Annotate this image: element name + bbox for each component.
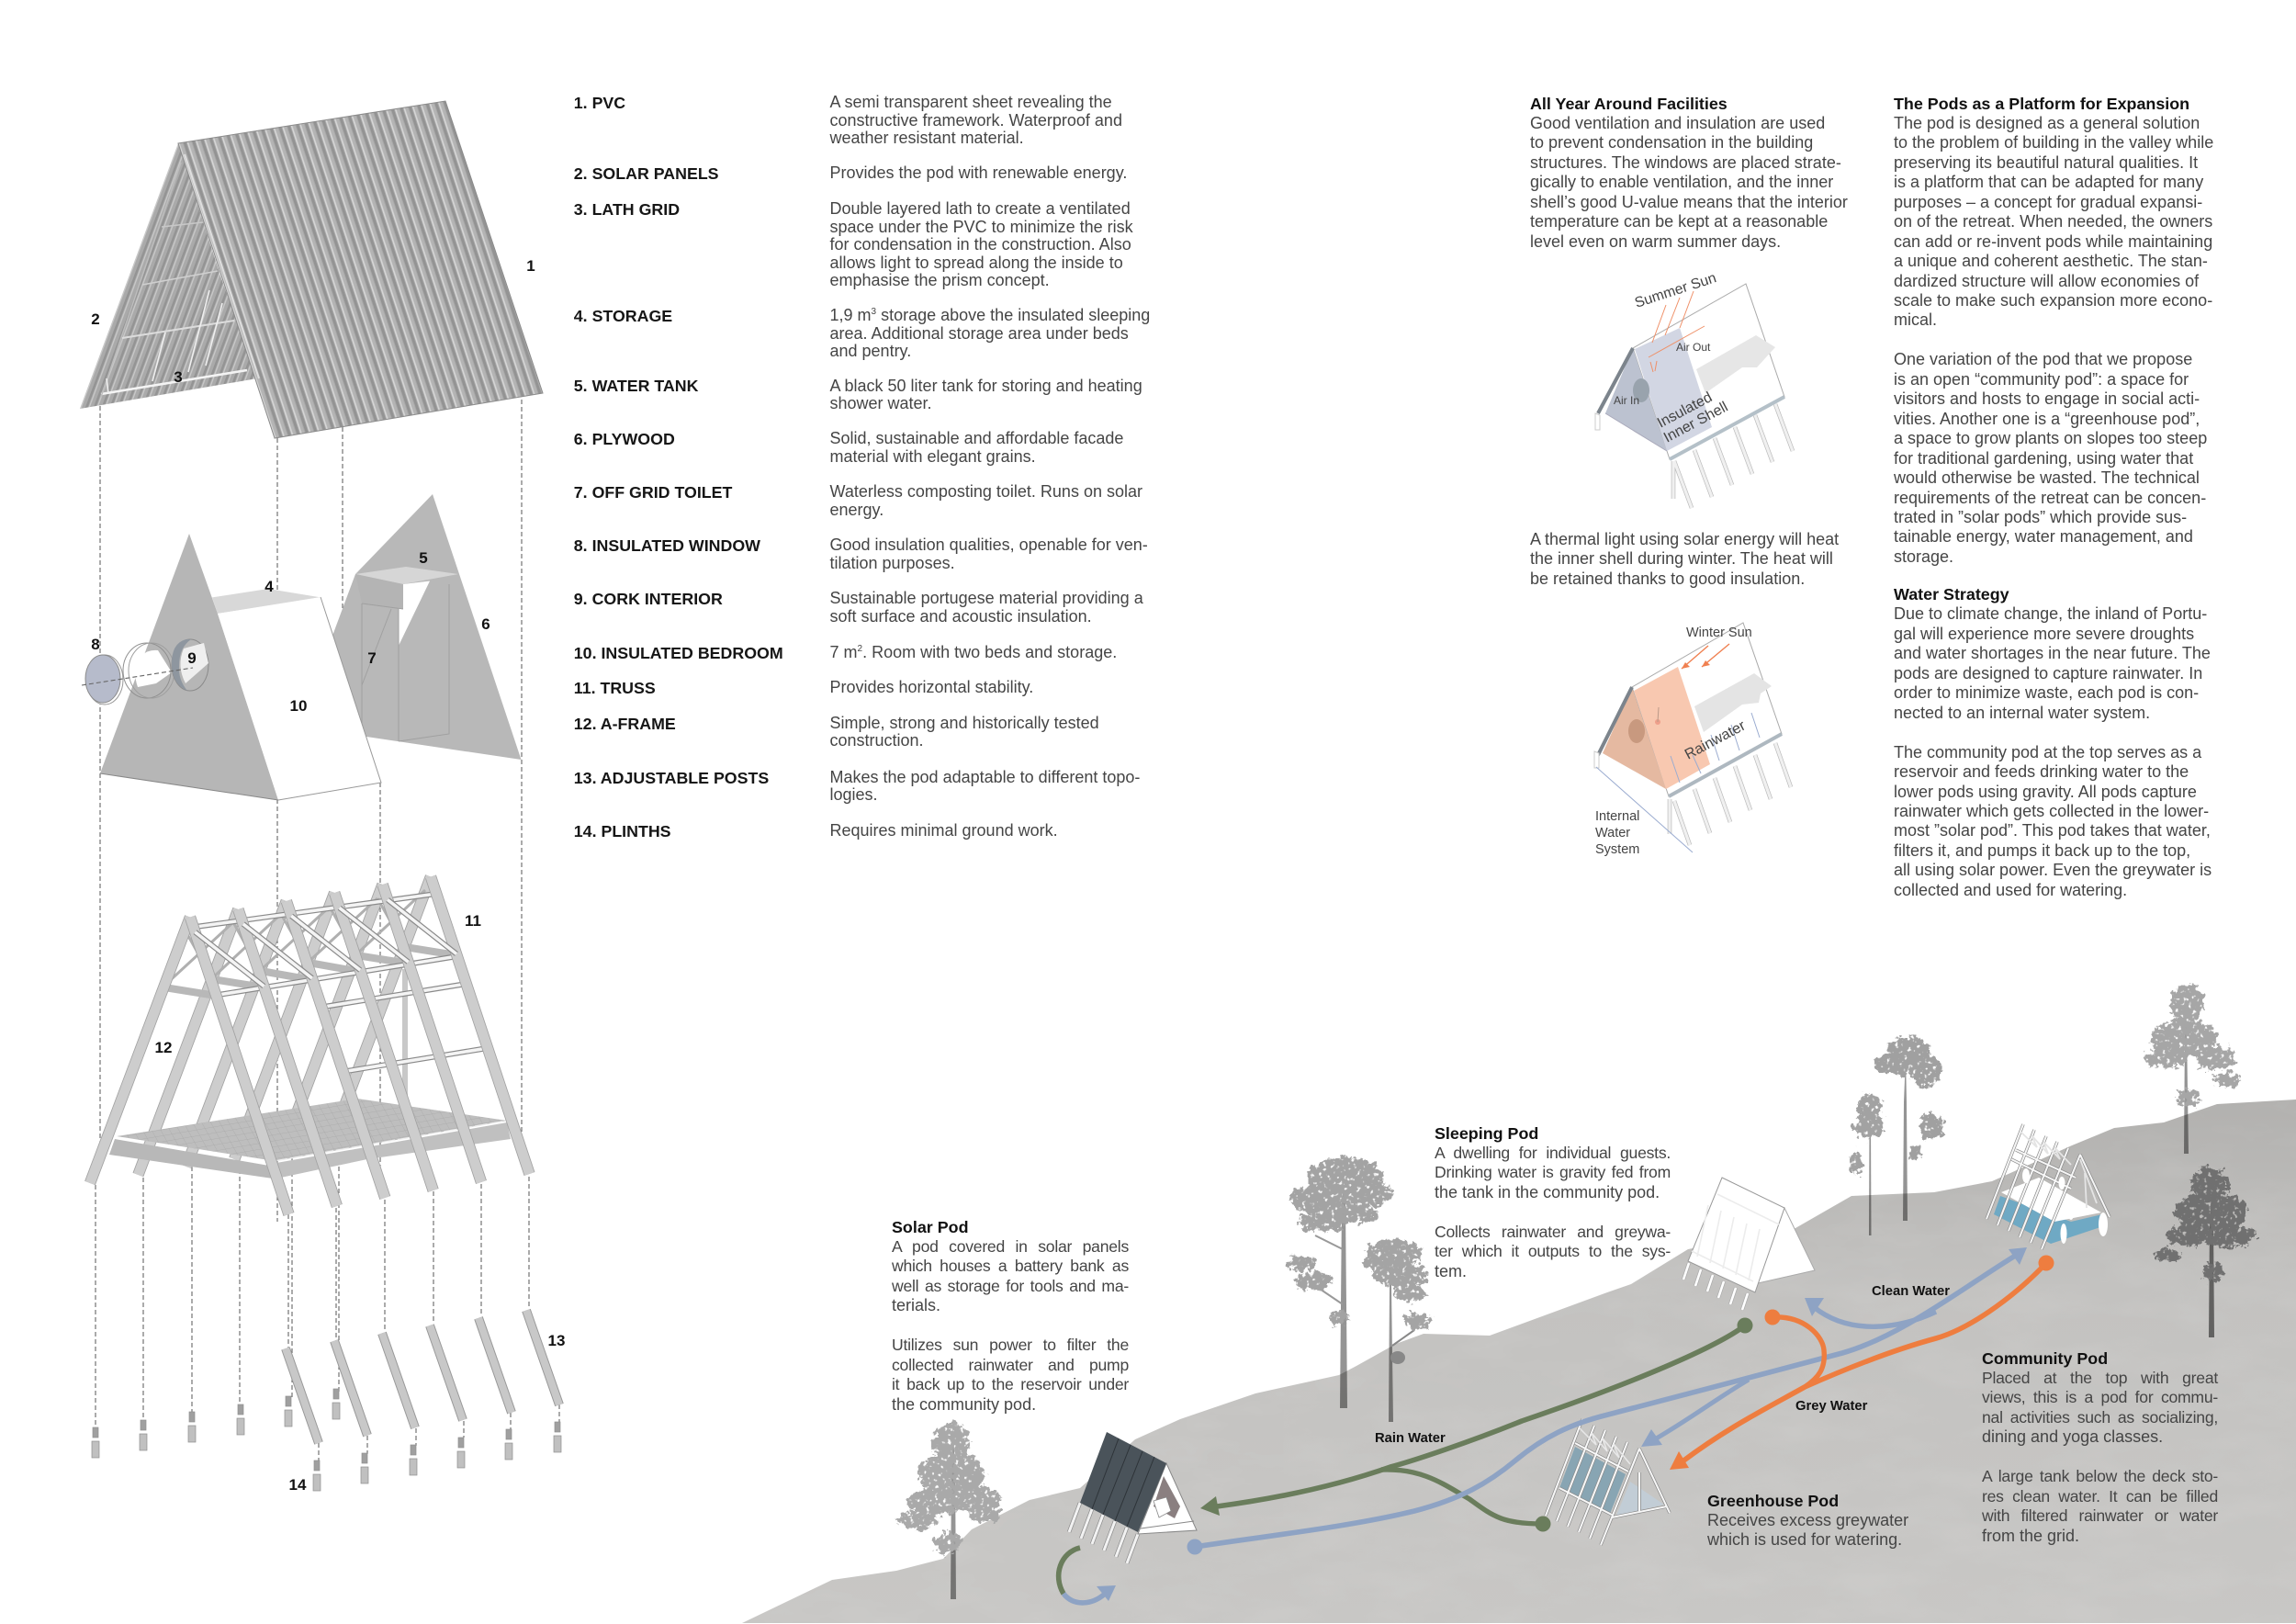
- item 5: [574, 377, 1142, 412]
- right legs: [431, 876, 529, 1174]
- pod: sleeping: [1683, 1178, 1815, 1310]
- diagram: winter heating and rainwater: Internal: [1595, 809, 1639, 824]
- component list: energy.: [830, 501, 884, 519]
- text: platform for expansion: is a platform that can be adapted for many: [1894, 173, 2203, 191]
- component list: area. Additional storage area under beds: [830, 323, 1129, 342]
- component list: for condensation in the construction. Also: [830, 235, 1131, 254]
- text: platform for expansion: for traditional gardening, using water that: [1894, 449, 2193, 468]
- text: water strategy: gal will experience more severe droughts: [1894, 625, 2194, 643]
- people: [2022, 1168, 2108, 1244]
- text: thermal light: the inner shell during winter. The heat will: [1530, 549, 1833, 568]
- text: thermal light: [1530, 530, 1839, 588]
- item 6: [574, 429, 1123, 466]
- diagram: summer ventilation: Air In: [1614, 394, 1639, 407]
- axonometric: exploded pod: [80, 101, 565, 1494]
- tree: centre left tall pine: [1288, 1157, 1392, 1408]
- component list: A black 50 liter tank for storing and heating: [830, 377, 1142, 395]
- component numbers: [91, 257, 565, 1494]
- component list: allows light to spread along the inside to: [830, 254, 1123, 272]
- text: community pod: with filtered rainwater or water: [1982, 1506, 2218, 1525]
- component list: constructive framework. Waterproof and: [830, 110, 1122, 129]
- tree: upper slope tall pine: [1874, 1037, 1944, 1221]
- text: platform for expansion: a unique and coherent aesthetic. The stan-: [1894, 252, 2208, 270]
- component list: 14. PLINTHS: [574, 822, 671, 840]
- text: community pod: A large tank below the deck sto-: [1982, 1467, 2218, 1485]
- text: platform for expansion: visitors and hosts to engage in social acti-: [1894, 389, 2200, 408]
- text: solar pod: well as storage for tools and ma-: [892, 1277, 1129, 1295]
- text: water strategy: reservoir and feeds drinking water to the: [1894, 762, 2189, 781]
- roof laths: [196, 894, 457, 995]
- component list: A semi transparent sheet revealing the: [830, 93, 1112, 111]
- sun and air arrows: [1649, 291, 1705, 372]
- text: thermal light: be retained thanks to good insulation.: [1530, 570, 1805, 588]
- text: all year around facilities: Good ventilation and insulation are used: [1530, 114, 1825, 132]
- text: community pod: nal activities such as socializing,: [1982, 1408, 2218, 1427]
- text: all year around facilities: structures. The windows are placed strate-: [1530, 153, 1841, 172]
- lath grid bars: [101, 154, 259, 397]
- component list: Sustainable portugese material providing a: [830, 589, 1143, 607]
- text: platform for expansion: The pod is designed as a general solution: [1894, 114, 2200, 132]
- diagram: summer ventilation: Insulated: [1655, 389, 1715, 432]
- component list: 10. INSULATED BEDROOM: [574, 644, 783, 662]
- text: water strategy: order to minimize waste, each pod is con-: [1894, 683, 2199, 702]
- flow labels: Rain Water: [1375, 1431, 1446, 1446]
- pod: solar: [1069, 1432, 1197, 1563]
- component list: Provides the pod with renewable energy.: [830, 164, 1127, 182]
- component list: shower water.: [830, 394, 932, 412]
- component numbers: 11: [465, 912, 481, 930]
- text: platform for expansion: vities. Another one is a “greenhouse pod”,: [1894, 410, 2200, 428]
- text: greenhouse pod: Greenhouse Pod: [1707, 1492, 1839, 1510]
- diagram: winter heating and rainwater: System: [1595, 842, 1639, 857]
- item 11: [574, 678, 1033, 697]
- water flow: grey water (orange): [1670, 1255, 2054, 1470]
- item 1: [574, 93, 1122, 147]
- text: greenhouse pod: which is used for watering.: [1707, 1530, 1902, 1549]
- component list: Makes the pod adaptable to different topo-: [830, 768, 1140, 786]
- component numbers: 13: [548, 1332, 565, 1349]
- item 8: [574, 536, 1148, 572]
- flow labels: Grey Water: [1795, 1399, 1868, 1414]
- component list: Requires minimal ground work.: [830, 821, 1058, 840]
- text: platform for expansion: requirements of the retreat can be concen-: [1894, 489, 2206, 507]
- dashed guide lines: [96, 400, 559, 1460]
- component list: 1,9 m3 storage above the insulated sleeping: [830, 306, 1150, 324]
- component list: Simple, strong and historically tested: [830, 714, 1099, 732]
- posts: adjustable: [286, 1310, 559, 1443]
- component numbers: 12: [155, 1039, 172, 1056]
- sun and rain arrows: [1682, 644, 1729, 669]
- component list: Double layered lath to create a ventilated: [830, 199, 1131, 218]
- component list: Good insulation qualities, openable for ven-: [830, 536, 1148, 554]
- text: platform for expansion: is an open “community pod”: a space for: [1894, 370, 2189, 389]
- text: community pod: views, this is a pod for commu-: [1982, 1388, 2218, 1406]
- component list: 2. SOLAR PANELS: [574, 164, 719, 183]
- diagram: summer ventilation: [1595, 270, 1793, 508]
- text: platform for expansion: on of the retreat. When needed, the owners: [1894, 212, 2212, 231]
- component numbers: 2: [91, 310, 100, 328]
- item 9: [574, 589, 1143, 626]
- component list: 12. A-FRAME: [574, 715, 676, 733]
- text: water strategy: [1894, 585, 2212, 899]
- component list: 9. CORK INTERIOR: [574, 590, 723, 608]
- text: all year around facilities: level even on warm summer days.: [1530, 232, 1781, 251]
- tree: dark pine: [2156, 1167, 2257, 1337]
- text: sleeping pod: Collects rainwater and greywa-: [1435, 1223, 1671, 1241]
- water flow: rain water (green): [1200, 1317, 1752, 1532]
- component list: 7. OFF GRID TOILET: [574, 483, 732, 502]
- text: water strategy: Water Strategy: [1894, 585, 2009, 603]
- component list: emphasise the prism concept.: [830, 271, 1050, 289]
- text: solar pod: Utilizes sun power to filter the: [892, 1336, 1129, 1354]
- component numbers: 5: [419, 549, 428, 567]
- flow labels: [1375, 1284, 1950, 1446]
- component list: tilation purposes.: [830, 554, 955, 572]
- diagram: summer ventilation: Summer Sun: [1633, 270, 1718, 311]
- component list: weather resistant material.: [830, 129, 1024, 147]
- tree: upper slope small pine: [1851, 1094, 1885, 1235]
- component list: 7 m2. Room with two beds and storage.: [830, 643, 1117, 661]
- item 7: [574, 482, 1142, 519]
- text: all year around facilities: [1530, 94, 1848, 251]
- item 12: [574, 714, 1099, 750]
- component numbers: 7: [367, 649, 377, 667]
- text: solar pod: it back up to the reservoir under: [892, 1375, 1129, 1393]
- component list: Waterless composting toilet. Runs on solar: [830, 482, 1142, 501]
- pod: greenhouse: [1546, 1419, 1670, 1545]
- component list: Solid, sustainable and affordable facade: [830, 429, 1123, 447]
- text: water strategy: Due to climate change, the inland of Portu-: [1894, 604, 2207, 623]
- text: platform for expansion: scale to make such expansion more econo-: [1894, 291, 2212, 310]
- text: sleeping pod: A dwelling for individual guests.: [1435, 1144, 1671, 1162]
- component list: construction.: [830, 731, 924, 750]
- text: sleeping pod: [1435, 1124, 1671, 1280]
- component list: Provides horizontal stability.: [830, 678, 1033, 696]
- item 13: [574, 768, 1140, 804]
- text: community pod: res clean water. It can be filled: [1982, 1487, 2218, 1506]
- component list: 5. WATER TANK: [574, 377, 698, 395]
- item 3: [574, 199, 1133, 289]
- component list: material with elegant grains.: [830, 447, 1036, 466]
- text: water strategy: rainwater which gets collected in the lower-: [1894, 802, 2209, 820]
- text: water strategy: pods are designed to capture rainwater. In: [1894, 664, 2202, 682]
- text: solar pod: Solar Pod: [892, 1218, 969, 1236]
- text: platform for expansion: The Pods as a Platform for Expansion: [1894, 94, 2189, 112]
- text: all year around facilities: to prevent condensation in the building: [1530, 133, 1813, 152]
- prism: back facade with toilet and tank: [332, 494, 522, 760]
- text: community pod: [1982, 1348, 2219, 1545]
- diagram: winter heating and rainwater: Water: [1595, 826, 1630, 840]
- component list: soft surface and acoustic insulation.: [830, 607, 1092, 626]
- item 10: [574, 643, 1117, 662]
- text: platform for expansion: trated in ”solar pods” which provide sus-: [1894, 508, 2187, 526]
- component list: 13. ADJUSTABLE POSTS: [574, 769, 769, 787]
- diagram: winter heating and rainwater: Winter Sun: [1686, 626, 1752, 640]
- item 2: [574, 164, 1127, 183]
- text: platform for expansion: to the problem of building in the valley while: [1894, 133, 2213, 152]
- text: sleeping pod: ter which it outputs to the sys-: [1435, 1242, 1671, 1260]
- component numbers: 10: [290, 697, 307, 715]
- component list: 6. PLYWOOD: [574, 430, 675, 448]
- component list: [574, 93, 1150, 840]
- text: thermal light: A thermal light using solar energy will heat: [1530, 530, 1839, 548]
- component list: and pentry.: [830, 342, 911, 360]
- text: greenhouse pod: Receives excess greywater: [1707, 1511, 1908, 1529]
- icon: solar pod circular arrow: [1059, 1548, 1116, 1603]
- text: water strategy: collected and used for watering.: [1894, 881, 2127, 899]
- text: water strategy: and water shortages in the near future. The: [1894, 644, 2211, 662]
- component numbers: 4: [264, 578, 274, 595]
- item 4: [574, 306, 1150, 360]
- component numbers: 9: [187, 649, 197, 667]
- text: water strategy: nected to an internal water system. The community pod at the top serves as a: [1894, 704, 2201, 761]
- component numbers: 14: [289, 1476, 307, 1494]
- water flow: clean water (blue): [1187, 1247, 2027, 1554]
- item 14: [574, 821, 1058, 840]
- text: sleeping pod: Drinking water is gravity fed from: [1435, 1163, 1671, 1181]
- diagram: summer ventilation: Inner Shell: [1661, 400, 1730, 446]
- component list: 11. TRUSS: [574, 679, 656, 697]
- terrain: hillside: [735, 1093, 2296, 1624]
- text: community pod: Placed at the top with great: [1982, 1369, 2218, 1387]
- component numbers: 6: [481, 615, 490, 633]
- component list: logies.: [830, 785, 878, 804]
- frame: A-frame truss and floor: [90, 876, 529, 1214]
- text: solar pod: A pod covered in solar panels: [892, 1237, 1129, 1256]
- text: water strategy: most ”solar pod”. This pod takes that water,: [1894, 821, 2211, 840]
- window: insulated frame rings: [82, 639, 208, 705]
- text: platform for expansion: dardized structure will allow economies of: [1894, 272, 2199, 290]
- text: water strategy: filters it, and pumps it back up to the top,: [1894, 841, 2190, 860]
- component list: 4. STORAGE: [574, 307, 672, 325]
- diagram: summer ventilation: Air Out: [1676, 341, 1711, 354]
- component list: 8. INSULATED WINDOW: [574, 536, 760, 555]
- component numbers: 8: [91, 636, 100, 653]
- tree: centre right pine: [1362, 1239, 1431, 1422]
- component list: 1. PVC: [574, 94, 625, 112]
- text: sleeping pod: the tank in the community pod. tem.: [1435, 1183, 1660, 1280]
- text: water strategy: lower pods using gravity. All pods capture: [1894, 783, 2197, 801]
- text: platform for expansion: a space to grow plants on slopes too steep: [1894, 429, 2207, 447]
- text: greenhouse pod: [1707, 1492, 1908, 1549]
- pod: community: [1986, 1124, 2110, 1249]
- text: community pod: dining and yoga classes. from the grid.: [1982, 1427, 2163, 1545]
- tree: bottom left pine: [898, 1422, 1001, 1599]
- text: platform for expansion: would otherwise be wasted. The technical: [1894, 468, 2200, 487]
- text: all year around facilities: shell’s good U-value means that the interior: [1530, 193, 1848, 211]
- diagram: winter heating and rainwater: [1594, 623, 1791, 857]
- component list: space under the PVC to minimize the risk: [830, 217, 1133, 235]
- text: water strategy: all using solar power. Even the greywater is: [1894, 861, 2212, 879]
- text: platform for expansion: can add or re-invent pods while maintaining: [1894, 232, 2212, 251]
- right slope cross bracing: [195, 900, 456, 987]
- prism: front facade: [100, 534, 381, 800]
- text: all year around facilities: All Year Around Facilities: [1530, 94, 1728, 112]
- text: community pod: Community Pod: [1982, 1348, 2108, 1367]
- text: sleeping pod: Sleeping Pod: [1435, 1124, 1538, 1143]
- diagram: winter heating and rainwater: Rainwater: [1683, 717, 1749, 763]
- text: platform for expansion: tainable energy, water management, and: [1894, 527, 2193, 546]
- component list: 3. LATH GRID: [574, 200, 680, 219]
- text: solar pod: [892, 1218, 1129, 1414]
- component numbers: 3: [174, 368, 183, 386]
- text: platform for expansion: [1894, 94, 2213, 566]
- roof: corrugated PVC shell: [80, 101, 543, 438]
- text: solar pod: collected rainwater and pump: [892, 1356, 1129, 1374]
- text: platform for expansion: preserving its beautiful natural qualities. It: [1894, 153, 2198, 172]
- plinths: [92, 1389, 561, 1491]
- flow labels: Clean Water: [1872, 1284, 1950, 1299]
- text: all year around facilities: temperature can be kept at a reasonable: [1530, 212, 1828, 231]
- tree: top right pine: [2144, 984, 2240, 1154]
- text: platform for expansion: storage.: [1894, 547, 1953, 566]
- text: solar pod: terials. the community pod.: [892, 1296, 1036, 1414]
- floor deck: [117, 1099, 507, 1161]
- text: platform for expansion: purposes – a concept for gradual expansi-: [1894, 193, 2202, 211]
- text: all year around facilities: gically to enable ventilation, and the inner: [1530, 173, 1833, 191]
- rear bracing: [164, 890, 425, 986]
- text: solar pod: which houses a battery bank as: [892, 1257, 1129, 1275]
- component numbers: 1: [526, 257, 535, 275]
- text: platform for expansion: mical. One variation of the pod that we propose: [1894, 310, 2192, 368]
